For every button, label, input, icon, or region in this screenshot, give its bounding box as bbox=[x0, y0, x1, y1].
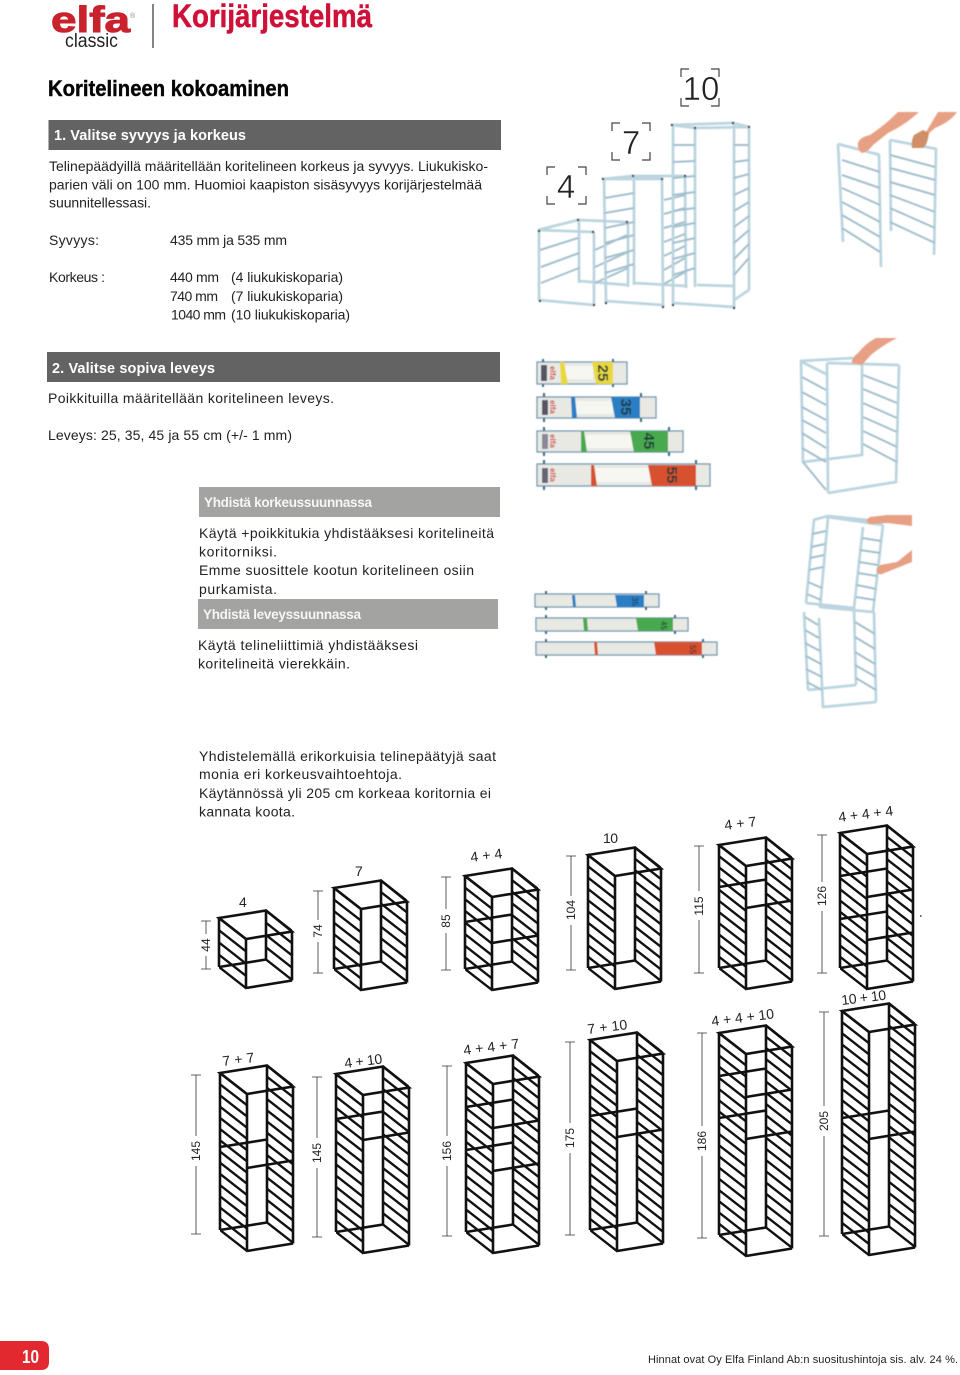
text block: depth and height specifications bbox=[49, 232, 350, 322]
size marker: 10: 10 bbox=[683, 70, 719, 107]
heading bar: step 2: 2. Valitse sopiva leveys bbox=[52, 361, 215, 377]
heading bar: combine vertically bbox=[199, 487, 500, 517]
photo: end frames for 4, 7 and 10 baskets bbox=[538, 123, 749, 308]
photo: width bars set 25 35 45 55: elfa bbox=[548, 400, 557, 414]
text block: depth and height specifications: 1040 mm bbox=[171, 306, 226, 322]
logo: elfa classic: ® bbox=[130, 12, 136, 20]
text block: combine vertically bbox=[199, 525, 494, 597]
text block: depth and height specifications: (4 liukukiskoparia) bbox=[231, 269, 343, 285]
heading bar: combine horizontally: Yhdistä leveyssuunnassa bbox=[203, 607, 361, 622]
text block: step 2: Poikkituilla määritellään koritelineen leveys. bbox=[48, 390, 334, 406]
text block: step 2 bbox=[48, 390, 334, 443]
text block: combine horizontally bbox=[198, 637, 418, 672]
photo: width connectors 35 45 55: 45 bbox=[659, 621, 668, 630]
text block: combine vertically: Käytä +poikkitukia yhdistääksesi koritelineitä bbox=[199, 525, 494, 541]
rack diagram: 4 + 4 + 10 bbox=[695, 1005, 792, 1256]
rack diagram: 4 + 4 + 10: 186 bbox=[695, 1131, 709, 1151]
heading bar: combine horizontally bbox=[198, 599, 498, 629]
logo: elfa classic: classic bbox=[65, 31, 118, 52]
logo: elfa classic bbox=[51, 0, 136, 52]
rack diagram: 7 + 10 bbox=[563, 1016, 663, 1251]
text block: step 1 intro: parien väli on 100 mm. Huomioi kaapiston sisäsyvyys korijärjestelmää bbox=[49, 176, 482, 192]
rack diagram: 10: 10 bbox=[603, 830, 618, 846]
photo: width bars set 25 35 45 55: 45 bbox=[640, 433, 657, 449]
text block: depth and height specifications: Korkeus : bbox=[49, 269, 105, 285]
text block: combine vertically: Emme suosittele kootun koritelineen osiin bbox=[199, 562, 474, 578]
photo: width bars set 25 35 45 55: elfa bbox=[548, 434, 557, 448]
rack diagram: 10 bbox=[564, 830, 661, 989]
rack diagram: 4 + 7: 4 + 7 bbox=[723, 813, 757, 833]
size marker: 7 bbox=[612, 123, 650, 161]
photo: width bars set 25 35 45 55: 25 bbox=[594, 365, 611, 381]
rack diagram: 10 + 10: 10 + 10 bbox=[840, 987, 887, 1008]
rack diagram: 10: 104 bbox=[564, 900, 578, 920]
rack diagram: 7 + 7: 145 bbox=[189, 1141, 203, 1161]
text block: combine horizontally: koritelineitä vierekkäin. bbox=[198, 656, 350, 672]
rack diagram: 4 + 7: 115 bbox=[692, 896, 706, 916]
size marker: 4: 4 bbox=[557, 168, 575, 205]
photo: width connectors 35 45 55 bbox=[535, 591, 717, 658]
text block: height combinations: Yhdistelemällä erikorkuisia telinepäätyjä saat bbox=[199, 748, 496, 764]
rack diagram: 4 bbox=[199, 894, 292, 988]
rack diagram: 4 + 10: 145 bbox=[310, 1143, 324, 1163]
page number tab bbox=[0, 1341, 49, 1370]
rack diagram: 4 + 4 + 4 bbox=[815, 802, 922, 989]
rack diagram: 4 + 4: 85 bbox=[439, 914, 453, 928]
photo: width bars set 25 35 45 55 bbox=[537, 359, 710, 490]
logo: elfa classic: elfa bbox=[51, 0, 131, 40]
heading bar: step 2 bbox=[47, 352, 500, 382]
rack diagram: 4 + 4 + 7: 4 + 4 + 7 bbox=[462, 1035, 520, 1058]
rack diagram: 7 + 7 bbox=[189, 1049, 293, 1251]
text block: combine vertically: koritorniksi. bbox=[199, 544, 277, 560]
photo: assembled basket frame with hand bbox=[800, 338, 899, 493]
rack diagram: 7: 7 bbox=[355, 863, 363, 879]
rack diagram: 4 + 4: 4 + 4 bbox=[469, 845, 503, 865]
photo: hands holding two end frames bbox=[838, 112, 957, 267]
rack diagram: 4 + 4 + 4: 126 bbox=[815, 886, 829, 906]
rack diagram: 4 + 4 + 4: 4 + 4 + 4 bbox=[837, 802, 894, 825]
rack diagram: 4 + 4 bbox=[439, 845, 538, 990]
size marker: 7: 7 bbox=[622, 124, 640, 161]
page number tab: 10 bbox=[22, 1347, 39, 1367]
photo: width connectors 35 45 55: 35 bbox=[630, 597, 639, 606]
text block: combine horizontally: Käytä telineliittimiä yhdistääksesi bbox=[198, 637, 418, 653]
title: Koritelineen kokoaminen bbox=[48, 76, 289, 101]
text block: step 1 intro: suunnitellessasi. bbox=[49, 194, 151, 210]
rack diagram: 7: 74 bbox=[311, 924, 325, 938]
rack diagram: 4: 4 bbox=[239, 894, 247, 910]
text block: depth and height specifications: 740 mm bbox=[170, 288, 218, 304]
rack diagram: 7 + 10: 175 bbox=[563, 1128, 577, 1148]
text block: height combinations: Käytännössä yli 205 cm korkeaa koritornia ei bbox=[199, 785, 491, 801]
photo: width bars set 25 35 45 55: elfa bbox=[548, 366, 557, 380]
rack diagram: 4 + 4 + 7: 156 bbox=[440, 1141, 454, 1161]
heading bar: step 1: 1. Valitse syvyys ja korkeus bbox=[54, 128, 246, 144]
photo: width bars set 25 35 45 55: 35 bbox=[617, 399, 634, 415]
text block: height combinations: kannata koota. bbox=[199, 804, 295, 820]
text block: depth and height specifications: 440 mm bbox=[170, 269, 219, 285]
text block: step 1 intro: Telinepäädyillä määritellään koritelineen korkeus ja syvyys. Liukukisko- bbox=[49, 158, 488, 174]
rack diagram: 7 + 10: 7 + 10 bbox=[586, 1016, 628, 1037]
heading bar: combine vertically: Yhdistä korkeussuunnassa bbox=[204, 495, 372, 510]
photo: width bars set 25 35 45 55: 55 bbox=[663, 467, 680, 483]
rack diagram: 4 + 4 + 7 bbox=[440, 1035, 539, 1253]
photo: width connectors 35 45 55: 55 bbox=[688, 645, 697, 654]
text block: step 1 intro bbox=[49, 158, 488, 210]
rack diagram: 10 + 10: 205 bbox=[817, 1111, 831, 1131]
text block: combine vertically: purkamista. bbox=[199, 581, 277, 597]
text block: step 2: Leveys: 25, 35, 45 ja 55 cm (+/- 1 mm) bbox=[48, 427, 292, 443]
rack diagram: 7 bbox=[311, 863, 407, 990]
photo: width bars set 25 35 45 55: elfa bbox=[548, 468, 557, 482]
rack diagram: 4: 44 bbox=[199, 938, 213, 952]
rack diagram: 4 + 10 bbox=[310, 1050, 409, 1253]
text block: depth and height specifications: (10 liukukiskoparia) bbox=[231, 306, 350, 322]
text block: depth and height specifications: Syvyys: bbox=[49, 232, 99, 248]
text block: depth and height specifications: (7 liukukiskoparia) bbox=[231, 288, 343, 304]
text block: height combinations: monia eri korkeusvaihtoehtoja. bbox=[199, 766, 402, 782]
size marker: 4 bbox=[547, 167, 586, 205]
rack diagram: 4 + 4 + 10: 4 + 4 + 10 bbox=[710, 1005, 775, 1029]
footnote: Hinnat ovat Oy Elfa Finland Ab:n suositushintoja sis. alv. 24 %. bbox=[648, 1354, 958, 1366]
rack diagram: 10 + 10 bbox=[817, 987, 915, 1255]
rack diagram: 4 + 10: 4 + 10 bbox=[343, 1050, 383, 1071]
text block: height combinations bbox=[199, 748, 496, 820]
photo: stacking two frames with hands bbox=[804, 515, 912, 708]
heading bar: step 1 bbox=[48, 120, 501, 150]
text block: depth and height specifications: 435 mm ja 535 mm bbox=[170, 232, 287, 248]
rack diagram: 7 + 7: 7 + 7 bbox=[221, 1049, 255, 1069]
rack diagram: 4 + 7 bbox=[692, 813, 792, 989]
